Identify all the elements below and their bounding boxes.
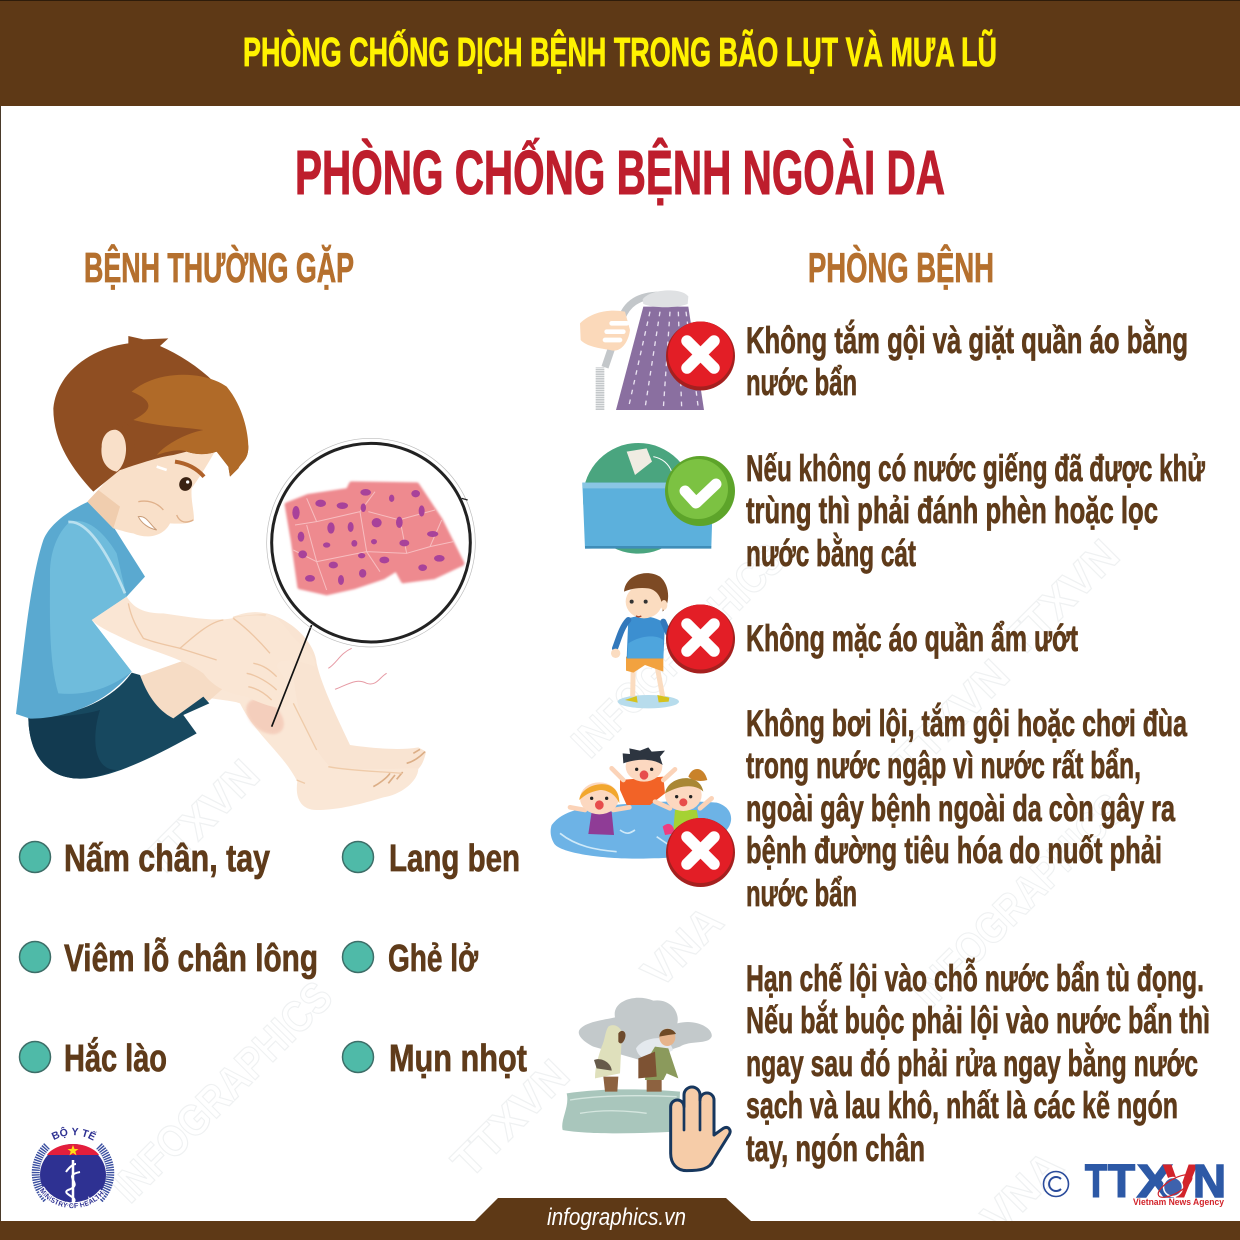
logo: TTXVN: Vietnam News Agency — [1133, 1197, 1225, 1208]
front leg and foot — [203, 612, 418, 810]
icon: stop hand — [671, 1087, 730, 1171]
item: Ghẻ lở — [342, 938, 479, 980]
heading: prevention: PHÒNG BỆNH — [808, 243, 994, 291]
right person — [636, 1038, 673, 1060]
prevention text 3: Không mặc áo quần ẩm ướt — [746, 618, 1078, 659]
child left — [588, 812, 614, 835]
magnifier pointer — [272, 625, 312, 727]
skin cells — [287, 484, 462, 593]
copyright symbol — [1044, 1172, 1068, 1196]
child right — [673, 810, 700, 830]
icon: water tub with alum — [582, 443, 713, 554]
prevention text 1: nước bẩn — [746, 362, 857, 403]
arm — [92, 597, 315, 708]
shorts — [28, 673, 209, 779]
heading: common diseases: BỆNH THƯỜNG GẶP — [84, 243, 354, 291]
item: Hắc lào: Hắc lào — [64, 1036, 167, 1080]
icon: shower with dirty water — [580, 290, 704, 410]
ear — [101, 430, 126, 472]
illustration: boy with skin disease — [16, 336, 475, 810]
item: Ghẻ lở: Ghẻ lở — [388, 938, 479, 980]
item: Nấm chân, tay — [20, 838, 270, 880]
prevention text 5: tay, ngón chân — [746, 1128, 925, 1169]
logo: Ministry of Health: BỘ Y TẾ — [51, 1126, 97, 1141]
prevention text 5 — [746, 958, 1210, 1169]
item: Mụn nhọt — [342, 1038, 527, 1080]
logo: TTXVN: T — [1108, 1155, 1135, 1207]
t-shirt — [16, 502, 145, 719]
rash squiggles — [328, 648, 387, 689]
logo: TTXVN — [1085, 1155, 1226, 1208]
item: Mụn nhọt: Mụn nhọt — [389, 1038, 527, 1080]
item: Lang ben — [342, 838, 520, 880]
text: TTXVN — [882, 650, 1019, 787]
icon: red cross badge 1 — [666, 322, 735, 390]
prevention text 2 — [746, 448, 1205, 574]
thigh — [138, 613, 267, 718]
header bar — [0, 0, 1240, 106]
text: TTXVN — [132, 750, 269, 887]
hair — [53, 336, 248, 492]
icon: red cross badge 3 — [666, 818, 735, 887]
item: Hắc lào — [20, 1036, 167, 1080]
item: Nấm chân, tay: Nấm chân, tay — [64, 838, 270, 880]
logo: TTXVN: X — [1137, 1155, 1173, 1207]
item: Viêm lỗ chân lông — [20, 936, 318, 980]
footer bar with website tab — [0, 1198, 1240, 1240]
redness on shin — [239, 692, 291, 741]
icon: children playing in flood water — [551, 747, 731, 859]
prevention text 1 — [746, 319, 1188, 403]
logo: TTXVN: V — [1163, 1155, 1197, 1207]
prevention text 4 — [746, 702, 1187, 914]
logo: TTXVN: T — [1085, 1155, 1107, 1207]
prevention text 4: nước bẩn — [746, 873, 857, 914]
child center — [620, 777, 665, 805]
icon: red cross badge 2 — [666, 604, 735, 674]
logo: Ministry of Health — [32, 1126, 114, 1208]
text: VNA — [972, 1142, 1073, 1240]
prevention text 2: nước bằng cát — [746, 532, 916, 574]
magnifier circle — [267, 438, 475, 647]
item: Viêm lỗ chân lông: Viêm lỗ chân lông — [64, 936, 318, 980]
logo: TTXVN: N — [1193, 1155, 1226, 1207]
text: INFOGRAPHICS — [102, 972, 342, 1212]
item: Lang ben: Lang ben — [389, 838, 520, 880]
eye, brow, mouth — [177, 475, 194, 493]
neck and face — [87, 443, 217, 536]
text: TTXVN — [442, 1050, 579, 1187]
left person — [595, 1025, 622, 1078]
back leg — [267, 613, 426, 775]
icon: boy in wet clothes — [611, 573, 679, 708]
text: INFOGRAPHICS — [562, 534, 795, 767]
logo: Ministry of Health: MINISTRY OF HEALTH — [38, 1186, 106, 1208]
icon: people wading through dirty flood water — [562, 998, 712, 1133]
text: TTXVN — [992, 530, 1129, 667]
disease list — [20, 838, 527, 1080]
text: INFOGRAPHICS — [902, 784, 1135, 1017]
icon: green check badge — [665, 456, 735, 526]
text: VNA — [632, 897, 733, 997]
website label: infographics.vn — [547, 1204, 686, 1231]
